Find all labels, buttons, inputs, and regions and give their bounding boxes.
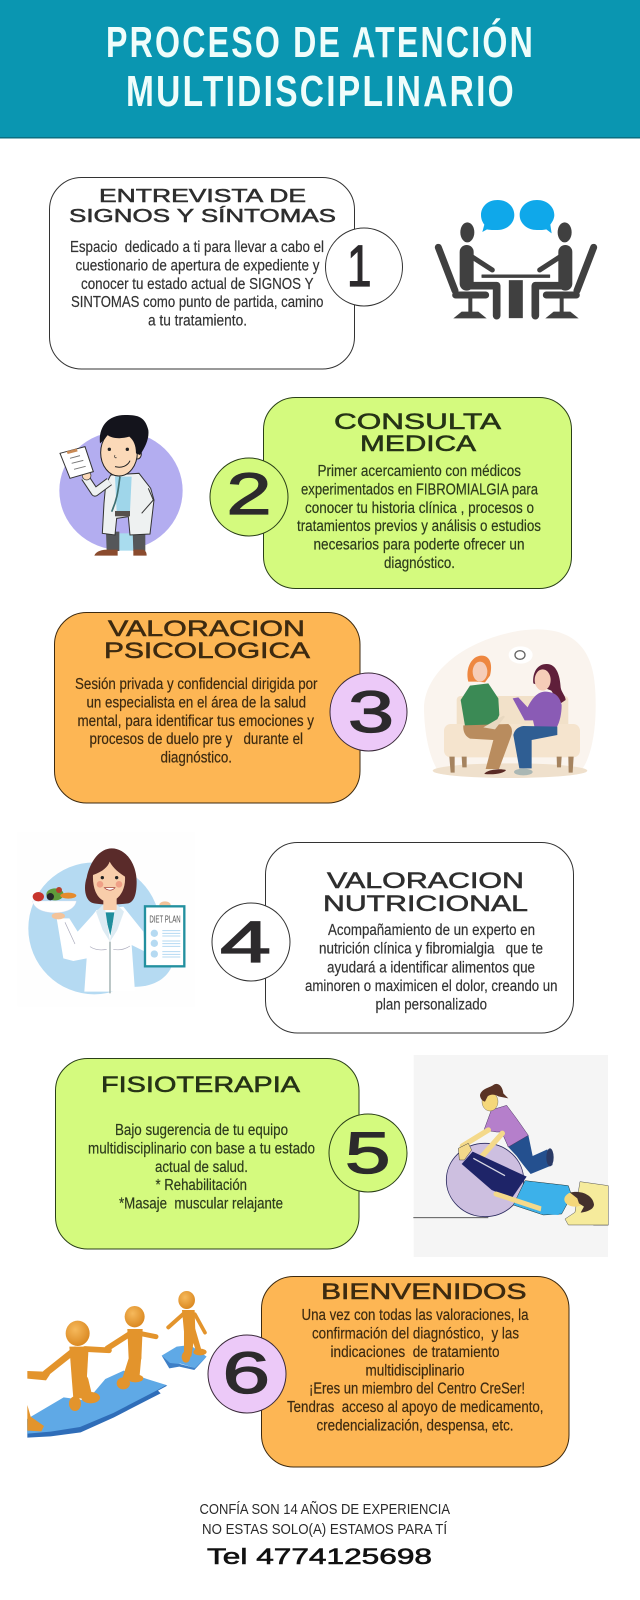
- icon: right sitter: [535, 222, 594, 318]
- icon: left sitter: [438, 222, 497, 318]
- heading: valoracion psicologica: [104, 616, 310, 663]
- text: bienvenidos description: ¡Eres un miembro del Centro CreSer!: [309, 1380, 525, 1398]
- text: consulta description: experimentados en FIBROMIALGIA para: [301, 482, 538, 498]
- illustration: therapy session on sofa: [424, 629, 596, 778]
- number circle 6: [208, 1335, 286, 1413]
- panel: step 1 entrevista: [50, 178, 354, 369]
- puzzle path: [27, 1345, 207, 1438]
- text: nutricional description: aminoren o maximicen el dolor, creando un: [305, 978, 558, 995]
- illustration: nutritionist with diet plan: [18, 832, 195, 1007]
- illustration: team on puzzle pieces: [27, 1291, 207, 1438]
- text: fisioterapia description: multidisciplinario con base a tu estado: [88, 1140, 315, 1158]
- text: psicologica description: mental, para identificar tus emociones y: [78, 713, 314, 730]
- number circle 1: 1: [347, 234, 372, 299]
- icon: table: [481, 274, 551, 319]
- text: bienvenidos description: Tendras acceso al apoyo de medicamento,: [287, 1399, 544, 1416]
- text: entrevista description: SINTOMAS como punto de partida, camino: [71, 294, 324, 311]
- title: MULTIDISCIPLINARIO: [126, 67, 516, 116]
- diet plan clipboard: DIET PLAN: [149, 914, 181, 925]
- text: bienvenidos description: multidisciplinario: [366, 1362, 464, 1380]
- number circle 4: 4: [220, 910, 271, 975]
- text: consulta description: [297, 463, 541, 572]
- text: bienvenidos description: indicaciones de tratamiento: [330, 1344, 500, 1361]
- text: fisioterapia description: Bajo sugerencia de tu equipo: [115, 1122, 288, 1139]
- heading: bienvenidos: BIENVENIDOS: [321, 1279, 526, 1304]
- text: nutricional description: Acompañamiento de un experto en: [328, 922, 535, 939]
- text: fisioterapia description: [88, 1122, 315, 1212]
- text: bienvenidos description: credencialización, despensa, etc.: [316, 1418, 514, 1434]
- number circle 4: [212, 903, 290, 981]
- text: nutricional description: [305, 922, 558, 1014]
- heading: valoracion nutricional: NUTRICIONAL: [323, 891, 528, 916]
- panel: step 2 consulta medica: [264, 398, 572, 588]
- text: entrevista description: cuestionario de apertura de expediente y: [76, 258, 320, 274]
- text: psicologica description: Sesión privada y confidencial dirigida por: [75, 676, 318, 693]
- diet plan clipboard: [145, 901, 184, 966]
- number circle 5: [329, 1114, 407, 1192]
- header banner: [0, 0, 640, 138]
- heading: valoracion nutricional: VALORACION: [327, 868, 524, 893]
- panel: step 6 bienvenidos: [262, 1276, 569, 1467]
- number circle 2: [210, 458, 288, 536]
- text: bienvenidos description: Una vez con todas las valoraciones, la: [302, 1307, 529, 1324]
- footer message: NO ESTAS SOLO(A) ESTAMOS PARA TÍ: [202, 1521, 448, 1538]
- text: nutricional description: ayudará a identificar alimentos que: [327, 960, 535, 976]
- illustration: physiotherapy on exercise ball: [413, 1055, 608, 1257]
- text: entrevista description: [70, 239, 324, 330]
- text: nutricional description: plan personalizado: [376, 996, 487, 1014]
- figure: far: [168, 1291, 207, 1363]
- text: consulta description: necesarios para poderte ofrecer un: [314, 536, 524, 554]
- heading: entrevista: [69, 186, 336, 226]
- text: entrevista description: Espacio dedicado a ti para llevar a cabo el: [70, 239, 324, 256]
- number circle 6: 6: [222, 1341, 270, 1406]
- number circle 1: [326, 228, 402, 306]
- heading: entrevista: SIGNOS Y SÍNTOMAS: [69, 206, 336, 226]
- panel: step 3 valoracion psicologica: [54, 612, 360, 803]
- text: fisioterapia description: * Rehabilitación: [156, 1177, 247, 1194]
- text: psicologica description: un especialista en el área de la salud: [86, 694, 306, 712]
- text: consulta description: Primer acercamiento con médicos: [318, 463, 521, 480]
- icon: speech bubbles: [481, 200, 554, 233]
- heading: consulta medica: CONSULTA: [334, 409, 501, 434]
- footer message: [200, 1501, 450, 1538]
- text: fisioterapia description: *Masaje muscular relajante: [119, 1196, 283, 1212]
- phone number: Tel 4774125698: [207, 1544, 432, 1569]
- heading: valoracion nutricional: [323, 868, 528, 916]
- figure: front: [46, 1321, 109, 1411]
- heading: consulta medica: [334, 409, 501, 456]
- heading: entrevista: ENTREVISTA DE: [99, 186, 306, 206]
- text: fisioterapia description: actual de salud.: [155, 1159, 248, 1176]
- heading: fisioterapia: FISIOTERAPIA: [101, 1072, 300, 1097]
- heading: consulta medica: MEDICA: [360, 431, 476, 456]
- icon: two people talking at a table: [438, 200, 594, 319]
- number circle 3: [330, 673, 407, 751]
- number circle 3: 3: [348, 680, 394, 745]
- text: entrevista description: conocer tu estado actual de SIGNOS Y: [81, 276, 314, 293]
- figure: left partial: [27, 1371, 50, 1431]
- illustration: doctor: [59, 415, 183, 556]
- text: nutricional description: nutrición clínica y fibromialgia que te: [319, 940, 543, 958]
- icon: salad: [33, 887, 76, 901]
- text: consulta description: conocer tu historia clínica , procesos o: [305, 500, 534, 517]
- text: psicologica description: [75, 676, 318, 766]
- heading: valoracion psicologica: VALORACION: [108, 616, 305, 641]
- figure: middle: [107, 1306, 156, 1389]
- text: psicologica description: procesos de duelo pre y durante el: [90, 731, 303, 748]
- text: bienvenidos description: confirmación del diagnóstico, y las: [312, 1326, 519, 1342]
- panel: step 5 fisioterapia: [56, 1058, 359, 1249]
- number circle 2: 2: [226, 462, 272, 527]
- footer message: CONFÍA SON 14 AÑOS DE EXPERIENCIA: [200, 1501, 450, 1518]
- text: psicologica description: diagnóstico.: [160, 750, 232, 766]
- panel: step 4 valoracion nutricional: [266, 842, 574, 1033]
- heading: valoracion psicologica: PSICOLOGICA: [104, 638, 310, 663]
- text: consulta description: diagnóstico.: [384, 555, 455, 572]
- title: [106, 17, 535, 116]
- number circle 5: 5: [345, 1121, 390, 1186]
- text: entrevista description: a tu tratamiento.: [148, 312, 247, 330]
- text: bienvenidos description: [287, 1307, 544, 1434]
- text: consulta description: tratamientos previos y análisis o estudios: [297, 518, 541, 535]
